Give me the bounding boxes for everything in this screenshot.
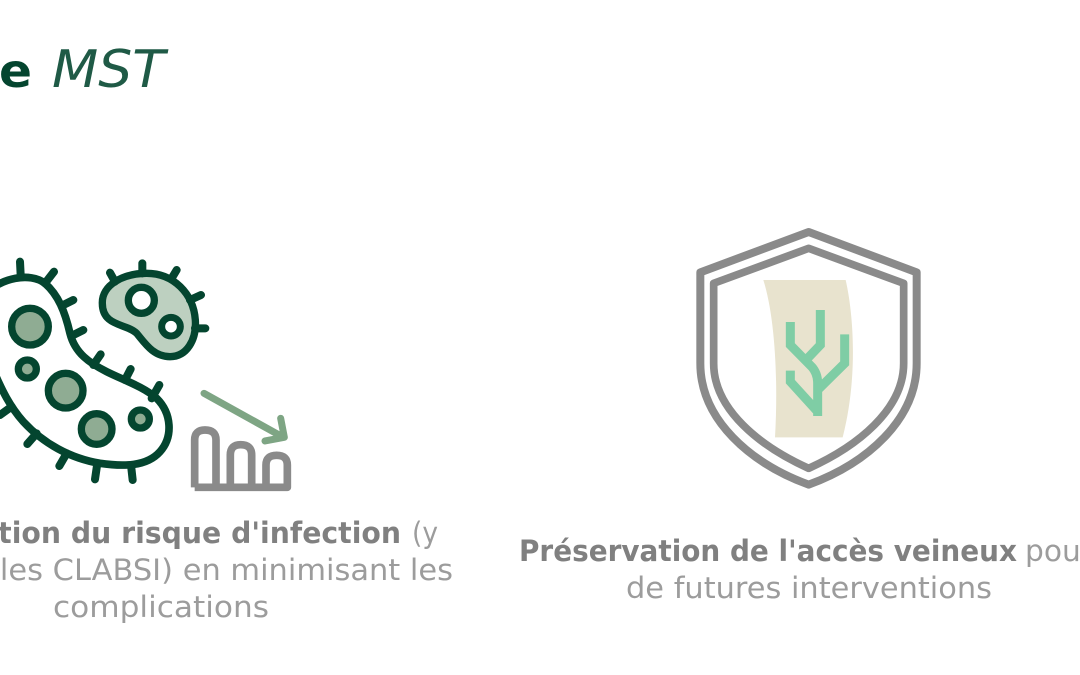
arrow: downward trend xyxy=(204,393,284,441)
text: venous access preservation: Préservation de l'accès veineux xyxy=(519,534,1017,568)
icon: declining bars xyxy=(195,430,287,487)
title: MST xyxy=(52,40,169,100)
veins xyxy=(790,310,845,416)
icon: shield with veins xyxy=(700,232,917,485)
icon: large bacterium xyxy=(0,262,169,480)
title xyxy=(0,40,169,100)
text: venous access preservation xyxy=(519,534,1080,605)
shield outline xyxy=(700,232,917,485)
text: infection risk reduction xyxy=(0,516,453,624)
skin patch xyxy=(763,280,853,437)
text: venous access preservation: de futures interventions xyxy=(626,571,992,605)
text: infection risk reduction: complications xyxy=(53,590,269,624)
icon: small bacterium xyxy=(102,263,205,357)
icon: bacteria with falling bar chart xyxy=(0,262,287,487)
text: infection risk reduction: (y xyxy=(412,516,438,550)
